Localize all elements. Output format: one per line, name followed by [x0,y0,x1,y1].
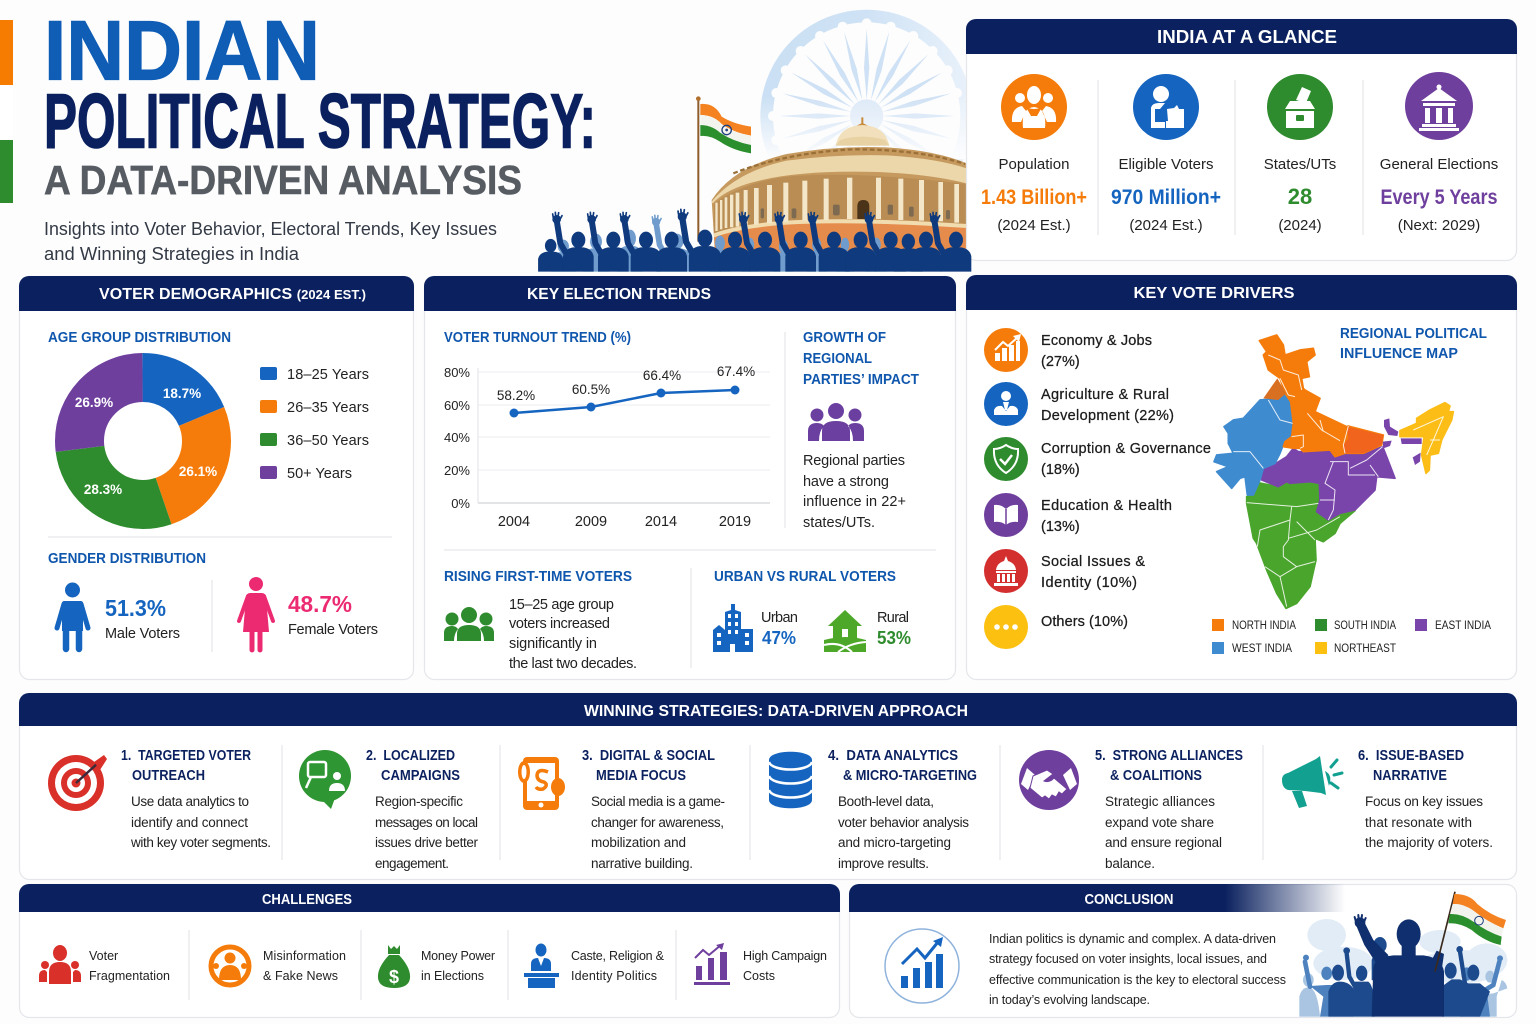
flag on pole [696,96,751,242]
panel: india at a glance [966,19,1517,260]
challenge: misinformation: & Fake News [263,969,338,983]
stat: female voters: Female Voters [288,622,378,638]
strategy 6: issue-based narrative: the majority of voters. [1365,835,1493,850]
stat: general elections: Every 5 Years [1380,186,1498,209]
icon: general elections [1405,72,1473,140]
panel: conclusion [849,884,1516,1018]
line chart: voter turnout: 67.4% [717,364,755,379]
line chart: voter turnout: 58.2% [497,388,535,403]
stat: eligible voters [1111,156,1221,234]
subheading: regional parties: PARTIES’ IMPACT [803,372,919,388]
map: regional political influence [1214,335,1453,608]
challenge: voter fragmentation [39,945,170,984]
title block [44,4,596,203]
driver: social issues: Identity (10%) [1041,575,1137,591]
strategy 1: targeted voter outreach: OUTREACH [132,768,205,784]
stat: population: 1.43 Billion+ [981,186,1087,209]
donut chart: age groups: 26.9% [75,395,113,410]
subheading: gender: GENDER DISTRIBUTION [48,551,206,567]
strategy 4: data analytics: & MICRO-TARGETING [843,768,977,784]
subtitle [44,219,497,264]
driver: education: Education & Health [1041,498,1172,514]
icon: population [1001,74,1067,140]
text: first-time voters: the last two decades. [509,656,637,672]
strategy 1: targeted voter outreach: Use data analytics to [131,794,249,809]
strategy 5: strong alliances [1019,748,1243,871]
stat: states and UTs: 28 [1288,184,1312,209]
text: first-time voters: 15–25 age group [509,597,614,613]
challenge: caste, religion and identity: Identity Politics [571,969,657,983]
challenge: money power: Money Power [421,949,495,963]
donut chart: age groups: 26.1% [179,464,217,479]
driver: economy [984,328,1152,372]
icon: handshake [1019,750,1079,810]
strategy 5: strong alliances: Strategic alliances [1105,794,1215,809]
challenge: money power: $ [389,967,399,987]
strategy 4: data analytics [769,748,977,871]
strategy 2: localized campaigns [299,748,478,871]
stat: rural: Rural [877,610,909,626]
tricolour side stripe [0,20,13,203]
strategy 2: localized campaigns: 2. LOCALIZED [366,748,455,764]
icon: growth chart [885,929,959,1003]
strategy 6: issue-based narrative [1282,748,1493,850]
heading: CHALLENGES [262,892,352,908]
challenge: money power [378,945,495,988]
challenge: high campaign costs: Costs [743,969,775,983]
challenge: money power: in Elections [421,969,484,983]
icon: eligible voters [1133,74,1199,140]
text: conclusion: strategy focused on voter insights, local issues, and [989,952,1267,966]
line chart: voter turnout: 60% [444,398,470,413]
strategy 5: strong alliances: expand vote share [1105,815,1214,830]
line chart: voter turnout: 2019 [719,514,751,530]
legend: map regions [1212,619,1491,655]
crowd silhouette [538,209,971,272]
driver: corruption: Corruption & Governance [1041,441,1211,457]
text: regional parties [803,453,906,531]
text: conclusion [989,932,1286,1007]
donut chart: age groups [75,378,217,504]
stat: female voters [288,591,378,638]
flag [1435,892,1506,972]
driver: others: Others (10%) [1041,614,1128,630]
stat: states and UTs [1264,156,1336,234]
stat: states and UTs: (2024) [1278,217,1322,234]
stat: general elections [1380,156,1498,234]
icon: speech bubble [299,750,351,809]
legend: age groups: 36–50 Years [287,433,369,449]
driver: agriculture: Development (22%) [1041,408,1174,424]
text: first-time voters: significantly in [509,636,597,652]
stat: male voters [105,595,180,642]
subheading: map title [1340,326,1487,362]
strategy 3: digital and social media: changer for awareness, [591,815,724,830]
subheading: regional parties: GROWTH OF [803,330,886,346]
icon: first-time voters group [444,607,494,641]
line chart: voter turnout: 40% [444,430,470,445]
legend: map regions: NORTH INDIA [1232,620,1296,632]
legend: map regions: NORTHEAST [1334,643,1396,655]
stat: population [981,156,1087,234]
icon: megaphone [1282,756,1342,808]
stat: eligible voters: (2024 Est.) [1129,217,1203,234]
driver: education: (13%) [1041,519,1080,535]
panel: voter demographics [19,276,414,680]
strategy 4: data analytics: 4. DATA ANALYTICS [828,748,958,764]
line chart: voter turnout: 2009 [575,514,607,530]
driver: corruption: (18%) [1041,462,1080,478]
legend: map regions: WEST INDIA [1232,643,1292,655]
heading: KEY ELECTION TRENDS [527,286,711,303]
strategy 5: strong alliances: and ensure regional [1105,835,1222,850]
legend: age groups: 26–35 Years [287,400,369,416]
subtitle: and Winning Strategies in India [44,244,300,264]
stat: rural [877,610,911,648]
title block: A DATA-DRIVEN ANALYSIS [44,157,522,203]
line chart: voter turnout [444,364,770,530]
text: conclusion: effective communication is the key to electoral success [989,973,1286,987]
stat: urban [761,610,798,648]
heading: INDIA AT A GLANCE [1157,27,1337,47]
dark mid-ground figures [1328,937,1490,1017]
challenge: caste, religion and identity [524,944,665,988]
subheading: regional parties: REGIONAL [803,351,872,367]
crowd with flag [1299,892,1507,1017]
subheading: regional parties [803,330,919,388]
challenge: voter fragmentation: Voter [89,949,118,963]
driver: agriculture [984,382,1174,426]
driver: agriculture: Agriculture & Rural [1041,387,1169,403]
strategy 2: localized campaigns: messages on local [375,815,478,830]
challenge: voter fragmentation: Fragmentation [89,969,170,983]
donut chart: age groups: 18.7% [163,386,201,401]
line chart: voter turnout: 2004 [498,514,530,530]
foreground leader figure [1355,915,1444,1017]
mid-tone figures [1303,955,1503,1017]
driver: corruption [984,437,1211,481]
strategy 2: localized campaigns: CAMPAIGNS [381,768,460,784]
icon: states and union territories [1267,74,1333,140]
text: conclusion: Indian politics is dynamic and complex. A data-driven [989,932,1276,946]
driver: others [984,605,1128,649]
strategy 3: digital and social media: Social media is a game- [591,794,725,809]
text: first-time voters [509,597,637,672]
stat: general elections: General Elections [1380,156,1498,173]
strategy 6: issue-based narrative: Focus on key issues [1365,794,1483,809]
strategy 6: issue-based narrative: that resonate with [1365,815,1472,830]
panel: key election trends [424,276,956,680]
strategy 4: data analytics: improve results. [838,856,929,871]
text: regional parties: Regional parties [803,453,905,469]
strategy 1: targeted voter outreach [48,748,271,850]
title block: POLITICAL STRATEGY: [44,78,596,164]
driver: economy: Economy & Jobs [1041,333,1152,349]
heading: KEY VOTE DRIVERS [1134,285,1295,302]
subheading: map title: REGIONAL POLITICAL [1340,326,1487,342]
strategy 3: digital and social media: narrative building. [591,856,693,871]
subheading: map title: INFLUENCE MAP [1340,346,1458,362]
subtitle: Insights into Voter Behavior, Electoral Trends, Key Issues [44,219,497,239]
challenge: caste, religion and identity: Caste, Religion & [571,949,665,963]
stat: general elections: (Next: 2029) [1398,217,1480,234]
challenge: misinformation: Misinformation [263,949,346,963]
icon: male voter [57,582,88,649]
icon: urban buildings [713,604,753,652]
stat: urban: 47% [762,628,796,648]
stat: male voters: Male Voters [105,626,180,642]
challenge: high campaign costs [694,943,827,985]
icon: rural farmhouse [824,610,866,652]
icon: smartphone [518,757,565,810]
driver: economy: (27%) [1041,354,1080,370]
line chart: voter turnout: 0% [451,496,470,511]
stat: male voters: 51.3% [105,595,166,621]
strategy 5: strong alliances: 5. STRONG ALLIANCES [1095,748,1243,764]
stat: population: (2024 Est.) [997,217,1071,234]
light background figures [1299,971,1507,1017]
heading: WINNING STRATEGIES: DATA-DRIVEN APPROACH [584,703,968,720]
legend: map regions: EAST INDIA [1435,620,1491,632]
subheading: urban vs rural: URBAN VS RURAL VOTERS [714,569,896,585]
strategy 6: issue-based narrative: NARRATIVE [1373,768,1447,784]
driver: social issues [984,549,1145,593]
subheading: age: AGE GROUP DISTRIBUTION [48,330,231,346]
strategy 1: targeted voter outreach: 1. TARGETED VOTER [121,748,251,764]
challenge: misinformation [211,947,346,985]
legend: age groups: 50+ Years [287,466,352,482]
icon: female voter [239,577,273,650]
panel: key vote drivers [966,275,1517,680]
strategy 1: targeted voter outreach: with key voter segments. [130,835,271,850]
strategy 2: localized campaigns: issues drive better [375,835,478,850]
donut chart: age groups: 28.3% [84,482,122,497]
text: regional parties: states/UTs. [803,515,875,531]
subheading: turnout: VOTER TURNOUT TREND (%) [444,330,631,346]
challenge: high campaign costs: High Campaign [743,949,827,963]
strategy 1: targeted voter outreach: identify and connect [131,815,248,830]
line chart: voter turnout: 80% [444,365,470,380]
text: conclusion: in today’s evolving landscape. [989,993,1150,1007]
title block: INDIAN [44,4,320,98]
ashoka chakra backdrop [753,16,973,216]
stat: rural: 53% [877,628,911,648]
heading: VOTER DEMOGRAPHICS (2024 EST.) [99,286,366,303]
stat: urban: Urban [761,610,798,626]
icon: target [48,755,107,811]
stat: population: Population [999,156,1069,173]
text: first-time voters: voters increased [509,616,610,632]
legend: age groups: 18–25 Years [287,367,369,383]
stat: female voters: 48.7% [288,591,352,617]
strategy 3: digital and social media: MEDIA FOCUS [596,768,686,784]
strategy 6: issue-based narrative: 6. ISSUE-BASED [1358,748,1464,764]
strategy 3: digital and social media: 3. DIGITAL & SOCIAL [582,748,715,764]
panel: winning strategies [19,693,1517,880]
line chart: voter turnout: 60.5% [572,382,610,397]
line chart: voter turnout: 20% [444,463,470,478]
parliament building [712,117,967,253]
strategy 5: strong alliances: balance. [1105,856,1155,871]
strategy 4: data analytics: voter behavior analysis [838,815,969,830]
line chart: voter turnout: 66.4% [643,368,681,383]
strategy 4: data analytics: Booth-level data, [838,794,934,809]
icon: regional parties group [808,403,864,441]
strategy 3: digital and social media: mobilization and [591,835,686,850]
strategy 2: localized campaigns: Region-specific [375,794,463,809]
driver: education [984,493,1172,537]
driver: social issues: Social Issues & [1041,554,1145,570]
text: regional parties: influence in 22+ [803,494,906,510]
panel: challenges [19,884,840,1018]
strategy 2: localized campaigns: engagement. [375,856,449,871]
legend: map regions: SOUTH INDIA [1334,620,1396,632]
subheading: first-time voters: RISING FIRST-TIME VOTERS [444,569,632,585]
strategy 3: digital and social media [518,748,725,871]
line chart: voter turnout: 2014 [645,514,677,530]
icon: database [769,752,812,808]
stat: eligible voters: Eligible Voters [1118,156,1214,173]
legend: age groups [260,367,369,482]
heading: CONCLUSION [1084,892,1174,908]
text: regional parties: have a strong [803,474,889,490]
stat: states and UTs: States/UTs [1264,156,1336,173]
strategy 4: data analytics: and micro-targeting [838,835,951,850]
strategy 5: strong alliances: & COALITIONS [1110,768,1202,784]
stat: eligible voters: 970 Million+ [1111,186,1221,209]
